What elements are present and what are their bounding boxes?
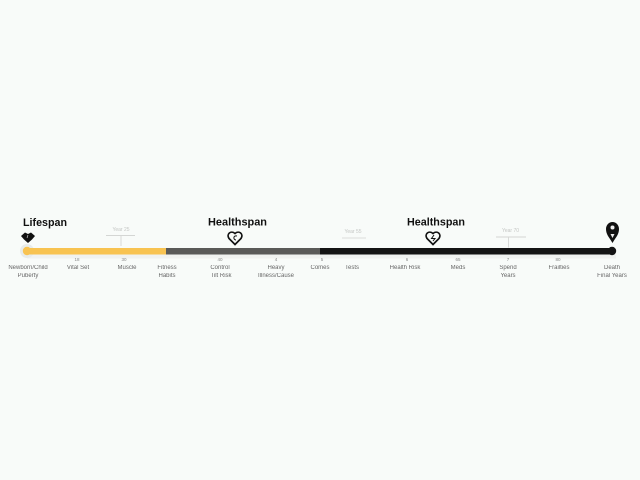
- milestone labels: 40: [217, 257, 223, 262]
- milestone labels: Tilt Risk: [210, 273, 233, 279]
- marker: upper annotation 3: [496, 228, 526, 248]
- milestone labels: Vital Set: [67, 265, 89, 271]
- milestone labels: Years: [500, 273, 516, 279]
- milestone labels: Fitness: [157, 265, 177, 271]
- milestone labels: 7: [507, 257, 510, 262]
- marker: upper annotation 1: [106, 227, 135, 246]
- marker: upper annotation 2: Year 55: [344, 229, 362, 235]
- milestone labels: Meds: [451, 265, 465, 271]
- milestone labels: Puberty: [18, 273, 38, 279]
- milestone labels: 65: [455, 257, 461, 262]
- milestone labels: 6: [406, 257, 409, 262]
- milestone labels: Comes: [310, 265, 330, 271]
- marker: upper annotation 2: [342, 229, 366, 238]
- marker: upper annotation 1: Year 25: [112, 227, 130, 233]
- icon: heart middle: [228, 232, 242, 244]
- timeline bar: [20, 244, 616, 258]
- milestone labels: 18: [74, 257, 80, 262]
- milestone labels: 4: [275, 257, 278, 262]
- milestone labels: Tests: [345, 265, 359, 271]
- milestone labels: Heavy: [267, 265, 285, 271]
- milestone labels: Death: [604, 265, 620, 271]
- icon: broken heart start: [21, 232, 35, 243]
- icon: end location pin: [606, 222, 619, 243]
- milestone labels: Spend: [499, 265, 517, 271]
- milestone labels: Control: [210, 265, 230, 271]
- milestone labels: Frailties: [548, 265, 570, 271]
- milestone labels: Muscle: [117, 265, 137, 271]
- milestone labels: [8, 257, 627, 279]
- heading: Healthspan left: Healthspan: [208, 216, 267, 228]
- milestone labels: Newborn/Child: [8, 265, 48, 271]
- milestone labels: Habits: [158, 273, 176, 279]
- marker: upper annotation 3: Year 70: [502, 228, 519, 234]
- icon: heart right: [426, 232, 440, 244]
- heading: Lifespan: Lifespan: [23, 217, 67, 229]
- heading: Healthspan right: Healthspan: [407, 216, 465, 228]
- milestone labels: 80: [555, 257, 561, 262]
- milestone labels: 5: [321, 257, 324, 262]
- milestone labels: Illness/Cause: [258, 273, 295, 279]
- milestone labels: 30: [121, 257, 127, 262]
- milestone labels: Final Years: [597, 273, 627, 279]
- milestone labels: Health Risk: [390, 265, 421, 271]
